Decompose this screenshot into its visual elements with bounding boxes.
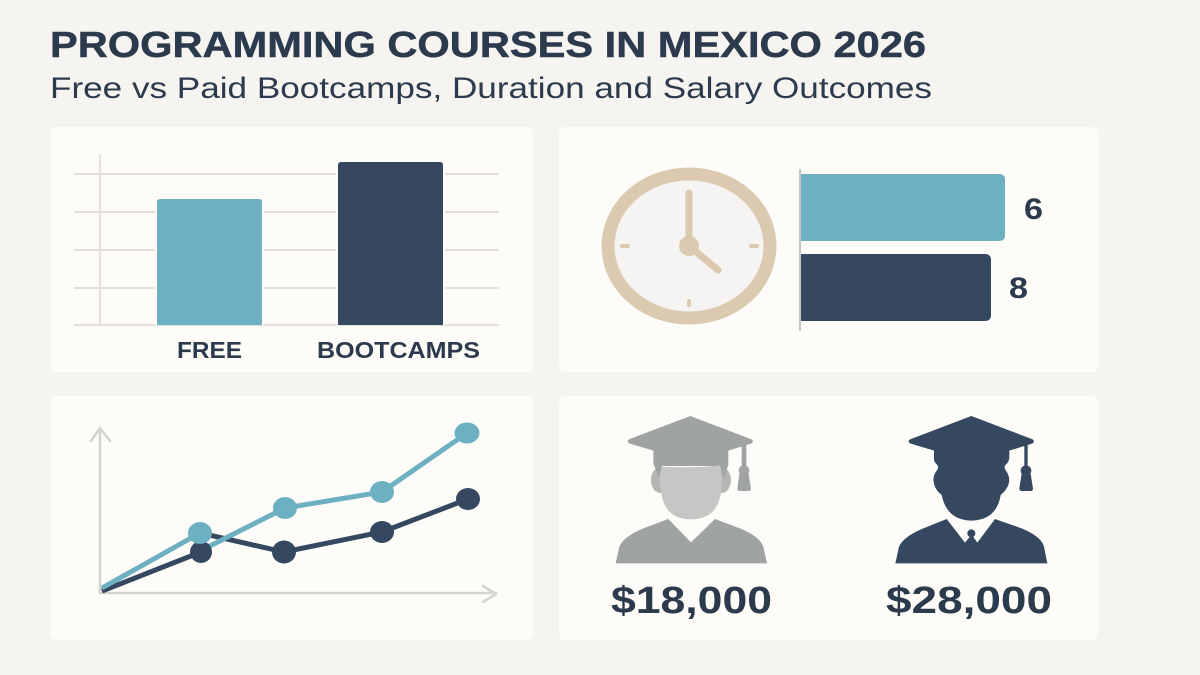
bar: bootcamps <box>336 160 445 325</box>
value: 6: 6 <box>1024 193 1043 226</box>
axes <box>91 428 496 602</box>
line: bootcamps later segment <box>205 488 480 564</box>
markers: free <box>188 422 480 544</box>
bar: free <box>155 197 264 325</box>
line: free later segment <box>200 433 467 551</box>
label: bootcamps: BOOTCAMPS <box>317 337 480 363</box>
panel: salary outcomes <box>559 396 1098 640</box>
value: 8: 8 <box>1009 272 1028 305</box>
icon: graduate gray <box>616 416 767 563</box>
value: bootcamp salary: $28,000 <box>886 580 1052 622</box>
bar: free duration <box>801 174 1005 241</box>
value: free salary: $18,000 <box>611 580 772 622</box>
icon: graduate navy <box>895 416 1047 563</box>
icon: clock <box>608 174 770 318</box>
panel: duration <box>559 127 1098 372</box>
panel: free vs bootcamps bar chart <box>50 127 533 372</box>
panel: salary trend line chart <box>50 396 533 640</box>
title: PROGRAMMING COURSES IN MEXICO 2026 <box>50 24 926 65</box>
subtitle: Free vs Paid Bootcamps, Duration and Salary Outcomes <box>50 72 932 105</box>
line: free first segment <box>102 533 200 588</box>
line: bootcamps first segment <box>102 541 212 591</box>
label: free: FREE <box>177 337 242 363</box>
bar: bootcamp duration <box>801 254 991 321</box>
lines and markers <box>102 422 480 591</box>
